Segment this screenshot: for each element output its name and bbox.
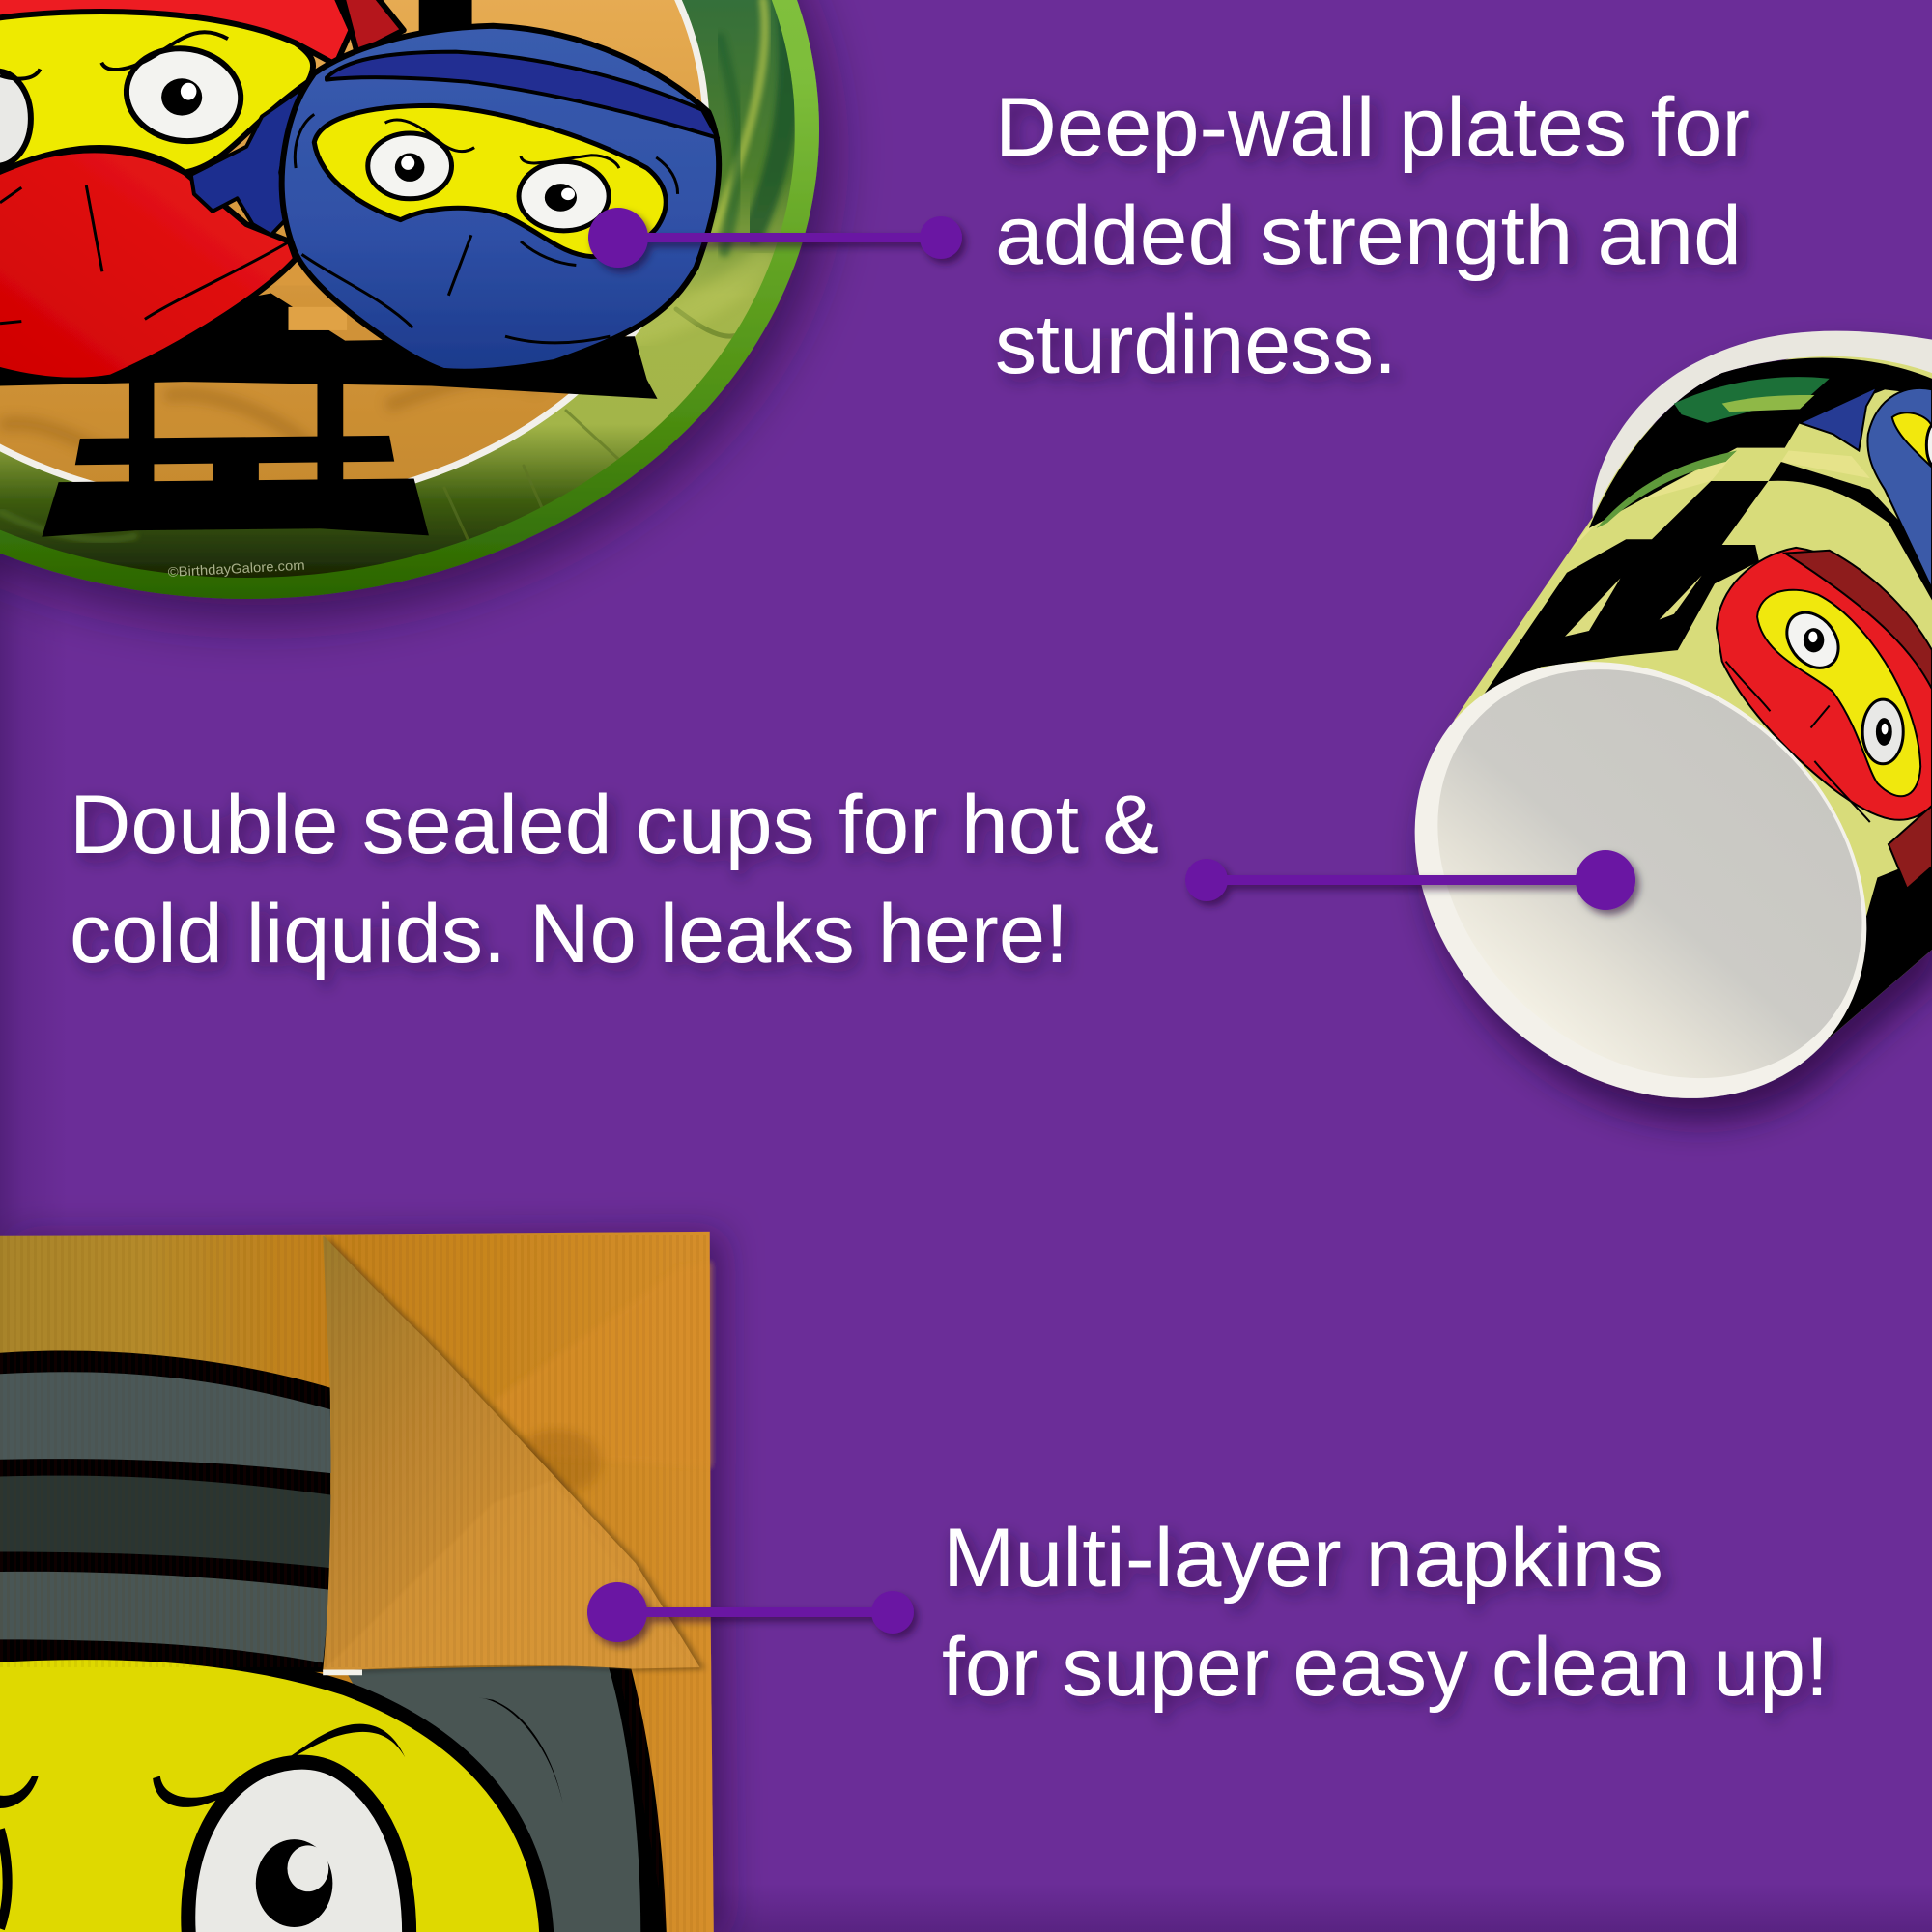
plate fluted wall — [0, 0, 795, 578]
lower hat — [345, 1665, 663, 1932]
connector: plate callout — [588, 208, 962, 268]
ninja hat stripes — [0, 1350, 331, 1672]
text: napkins: Multi-layer napkins — [943, 1512, 1663, 1605]
illustration: ninja plate — [0, 0, 819, 599]
torii gate silhouette — [0, 0, 658, 537]
copyright mark on plate: ©BirthdayGalore.com — [167, 557, 305, 580]
napkin ribbing — [0, 1235, 710, 1932]
text: napkins — [942, 1512, 1829, 1714]
napkin base — [0, 1232, 714, 1932]
plate rim — [0, 0, 819, 599]
cup top rim — [1592, 331, 1932, 517]
napkin fold — [323, 1236, 705, 1675]
yellow ninja face — [0, 1653, 563, 1932]
plate center — [0, 0, 706, 506]
red ninja print — [1717, 548, 1932, 889]
text: cups — [70, 779, 1159, 980]
illustration: folded napkin — [0, 1232, 714, 1932]
text: cups: cold liquids. No leaks here! — [70, 888, 1068, 980]
connector: napkin callout — [587, 1582, 914, 1642]
text: plates — [995, 81, 1750, 391]
illustration: paper cup — [1405, 330, 1932, 1144]
torii print on cup — [1482, 358, 1932, 1039]
blue ninja print — [1800, 386, 1932, 589]
ninja art, coordinates traced then scaled — [0, 0, 719, 537]
cup body — [1454, 351, 1932, 1039]
text: plates: sturdiness. — [995, 298, 1397, 391]
red ninja head — [0, 0, 404, 381]
text: plates: added strength and — [995, 189, 1742, 282]
connector: cup callout — [1185, 850, 1635, 910]
blue ninja head — [191, 26, 719, 372]
text: plates: Deep-wall plates for — [995, 81, 1750, 174]
text: cups: Double sealed cups for hot & — [70, 779, 1159, 871]
cup base — [1405, 662, 1866, 1144]
text: napkins: for super easy clean up! — [942, 1621, 1829, 1714]
